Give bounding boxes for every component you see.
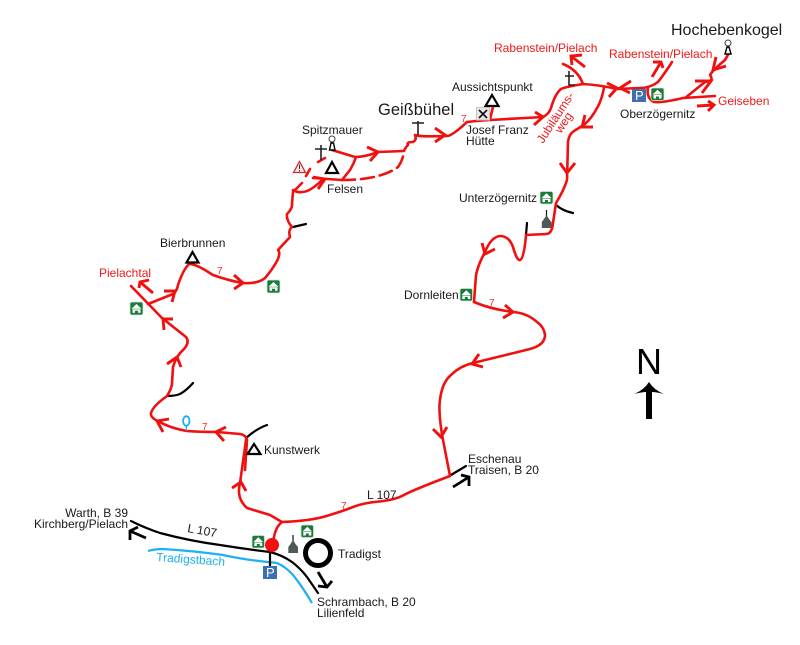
- icon: inn Dornleiten: [460, 288, 472, 301]
- label: Unterzögernitz: Unterzögernitz: [459, 191, 537, 205]
- road: L 107 east stub to Eschenau: [451, 466, 466, 475]
- icon: inn Bierbrunnen side: [267, 280, 280, 293]
- icon: inn Tradigst left: [252, 536, 264, 548]
- stream label: Tradigstbach: [156, 550, 226, 569]
- stream: Tradigstbach: [148, 549, 312, 603]
- trail numbers: 7: [202, 422, 208, 433]
- label: Josef Franz Hütte: [466, 123, 529, 148]
- label: Rabenstein/Pielach east: Rabenstein/Pielach: [609, 47, 712, 61]
- icon: inn Pielachtal side: [130, 302, 143, 315]
- label: Eschenau Traisen: Eschenau: [468, 452, 521, 466]
- icon: parking top: P: [635, 88, 644, 103]
- label: Josef Franz Hütte: Josef Franz: [466, 123, 529, 137]
- icon: parking Tradigst: P: [266, 565, 275, 580]
- trail numbers: 7: [461, 114, 467, 125]
- trail numbers: 7: [341, 501, 347, 512]
- label: Jubiläumsweg: Jubiläums-: [534, 89, 577, 146]
- label: L 107 east: L 107: [367, 488, 397, 502]
- label: Eschenau Traisen: Traisen, B 20: [468, 463, 539, 477]
- icon: parking Tradigst: [263, 565, 277, 580]
- label: Warth Kirchberg: [34, 506, 128, 531]
- label: Josef Franz Hütte: Hütte: [466, 134, 495, 148]
- north indicator: [634, 341, 664, 419]
- icon: warning sign: [294, 162, 306, 172]
- label: Schrambach Lilienfeld: Schrambach, B 20: [317, 595, 416, 609]
- peak: Hochebenkogel lookout: [725, 40, 731, 54]
- label: Schrambach Lilienfeld: Lilienfeld: [317, 606, 364, 620]
- label: Spitzmauer: Spitzmauer: [302, 123, 363, 137]
- icon: inn Tradigst right: [301, 525, 314, 538]
- town marker: Tradigst: [306, 540, 330, 566]
- icon: parking top: [632, 88, 646, 103]
- crosses: [315, 71, 575, 160]
- trail numbers: 7: [217, 266, 223, 277]
- icon: inn Unterzögernitz: [540, 192, 553, 204]
- north indicator: N: [636, 341, 662, 382]
- label: Warth Kirchberg: Warth, B 39: [65, 506, 128, 520]
- label: Bierbrunnen: Bierbrunnen: [160, 236, 225, 250]
- label: Jubiläumsweg: weg: [551, 110, 576, 136]
- heading: Hochebenkogel: Hochebenkogel: [671, 22, 782, 39]
- label: Pielachtal: Pielachtal: [99, 266, 151, 280]
- label: Oberzögernitz: Oberzögernitz: [620, 107, 695, 121]
- icon: Josef Franz Hütte: [476, 108, 490, 120]
- start point: [265, 538, 279, 552]
- label: Schrambach Lilienfeld: [317, 595, 416, 620]
- label: Eschenau Traisen: [468, 452, 539, 477]
- label: Felsen: Felsen: [327, 182, 363, 196]
- road: L 107 west and south: [131, 521, 318, 593]
- trail direction arrows: [139, 55, 726, 491]
- label: Dornleiten: Dornleiten: [404, 288, 459, 302]
- parking connector: [269, 552, 271, 566]
- lookout tower: Spitzmauer: [329, 136, 335, 150]
- label: Rabenstein/Pielach west: Rabenstein/Pielach: [494, 41, 597, 55]
- label: Kunstwerk: Kunstwerk: [264, 443, 321, 457]
- triangles: viewpoints: [186, 95, 498, 454]
- label: Geiseben: Geiseben: [718, 94, 769, 108]
- red trail network: [131, 53, 729, 545]
- side roads: [167, 205, 573, 438]
- label: L 107 west: L 107: [186, 521, 218, 540]
- label: Tradigst: Tradigst: [338, 547, 382, 561]
- road direction arrows: [130, 475, 469, 587]
- label: Aussichtspunkt: Aussichtspunkt: [452, 80, 533, 94]
- label: Warth Kirchberg: Kirchberg/Pielach: [34, 517, 128, 531]
- icon: church Unterzögernitz: [542, 210, 552, 228]
- icon: spring marker: [183, 416, 190, 431]
- icon: inn Oberzögernitz: [651, 88, 664, 100]
- heading: Geißbühel: Geißbühel: [378, 101, 454, 119]
- trail numbers: 7: [489, 298, 495, 309]
- icon: church Tradigst: [288, 535, 298, 553]
- trail numbers: [202, 114, 495, 512]
